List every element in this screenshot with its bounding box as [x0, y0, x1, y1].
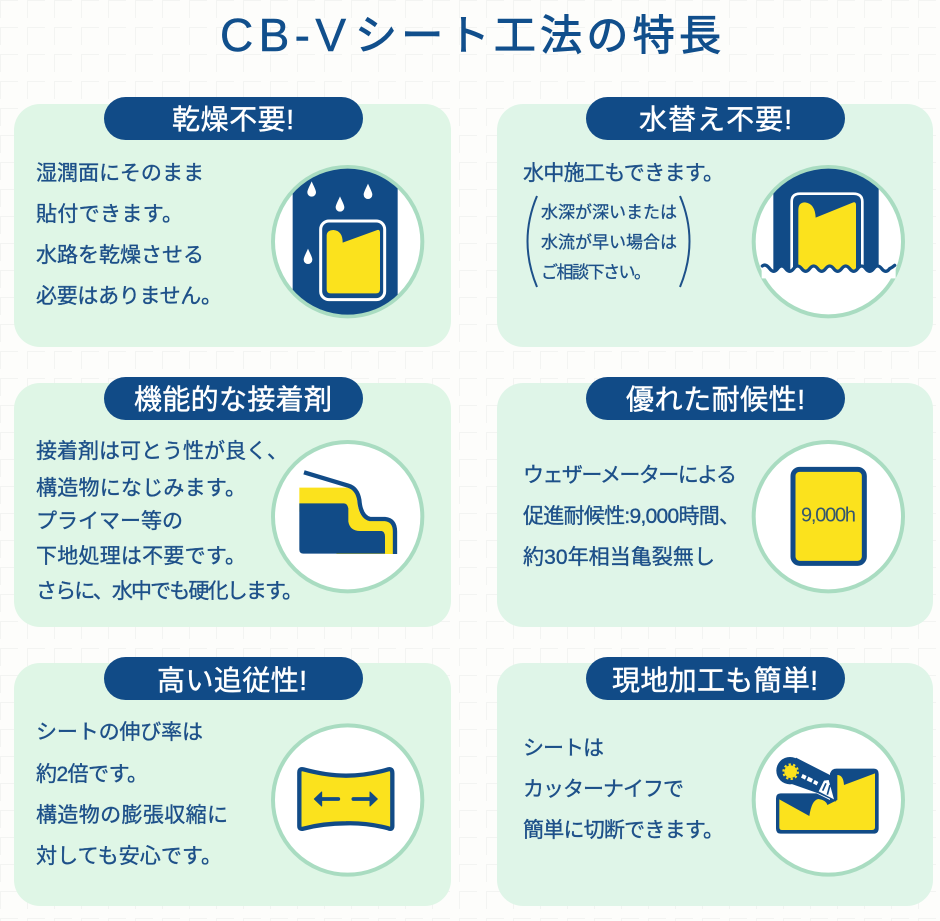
heading pill: 現地加工も簡単: [586, 657, 845, 700]
text block: 乾燥不要: 必要はありません。: [36, 285, 222, 308]
heading pill: 機能的な接着剤: [104, 377, 363, 420]
heading pill: 現地加工も簡単: 現地加工も簡単!: [612, 665, 818, 696]
icon: cutter knife and sheet: [754, 725, 903, 875]
title: CB-V: [220, 9, 346, 61]
panel: 乾燥不要: [14, 97, 451, 347]
panel: 高い追従性: [14, 657, 451, 906]
note in parentheses: [528, 196, 690, 287]
icon: sheet under water: [754, 163, 903, 316]
icon: 9,000h sheet: 9,000h: [801, 505, 856, 527]
note in parentheses: 水流が早い場合は: [541, 233, 677, 252]
text block: 現地加工: カッターナイフで: [523, 778, 684, 801]
icon: sheet in rain: [273, 163, 422, 320]
title: [220, 9, 721, 61]
text block: 現地加工: シートは: [523, 737, 604, 760]
heading pill: 優れた耐候性: 優れた耐候性!: [626, 384, 805, 415]
text block: 追従性: 対しても安心です。: [36, 845, 222, 868]
text block: 接着剤: 下地処理は不要です。: [36, 545, 246, 568]
text block: 接着剤: さらに、水中でも硬化します。: [36, 580, 303, 603]
text block: 水中施工: 水中施工もできます。: [523, 162, 724, 185]
icon: adhesive on structure: [273, 442, 422, 591]
heading pill: 水替え不要: 水替え不要!: [639, 104, 792, 135]
title: シート工法の特長: [355, 12, 721, 59]
text block: 耐候性: [523, 464, 740, 569]
note in parentheses: ご相談下さい。: [541, 263, 651, 282]
panel: 優れた耐候性: [497, 377, 933, 627]
text block: 現地加工: 簡単に切断できます。: [523, 819, 724, 842]
icon: 9,000h sheet: [754, 442, 903, 591]
text block: 追従性: シートの伸び率は: [36, 721, 203, 744]
text block: 接着剤: [36, 440, 303, 603]
heading pill: 乾燥不要: 乾燥不要!: [172, 104, 294, 135]
text block: 耐候性: 約30年相当亀裂無し: [523, 546, 715, 569]
text block: 乾燥不要: [36, 162, 222, 308]
text block: 乾燥不要: 水路を乾燥させる: [36, 244, 204, 267]
text block: 接着剤: 構造物になじみます。: [36, 477, 246, 500]
heading pill: 高い追従性: [104, 657, 363, 700]
text block: 乾燥不要: 湿潤面にそのまま: [36, 162, 204, 185]
text block: 接着剤: プライマー等の: [36, 510, 183, 533]
heading pill: 乾燥不要: [104, 97, 363, 140]
text block: 接着剤: 接着剤は可とう性が良く、: [36, 440, 288, 463]
text block: 耐候性: 促進耐候性:9,000時間、: [523, 505, 740, 528]
text block: 現地加工: [523, 737, 724, 842]
panel: 現地加工も簡単: [497, 657, 933, 906]
text block: 乾燥不要: 貼付できます。: [36, 203, 183, 226]
panel: 水替え不要: [497, 97, 933, 347]
text block: 追従性: 構造物の膨張収縮に: [36, 804, 228, 827]
note in parentheses: 水深が深いまたは: [541, 203, 677, 222]
heading pill: 優れた耐候性: [586, 377, 845, 420]
text block: 耐候性: ウェザーメーターによる: [523, 464, 737, 487]
heading pill: 水替え不要: [586, 97, 845, 140]
text block: 追従性: 約2倍です。: [36, 763, 148, 786]
text block: 追従性: [36, 721, 228, 868]
heading pill: 機能的な接着剤: 機能的な接着剤: [134, 384, 332, 415]
heading pill: 高い追従性: 高い追従性!: [157, 665, 307, 696]
icon: stretching sheet: [273, 725, 422, 875]
panel: 機能的な接着剤: [14, 377, 451, 627]
